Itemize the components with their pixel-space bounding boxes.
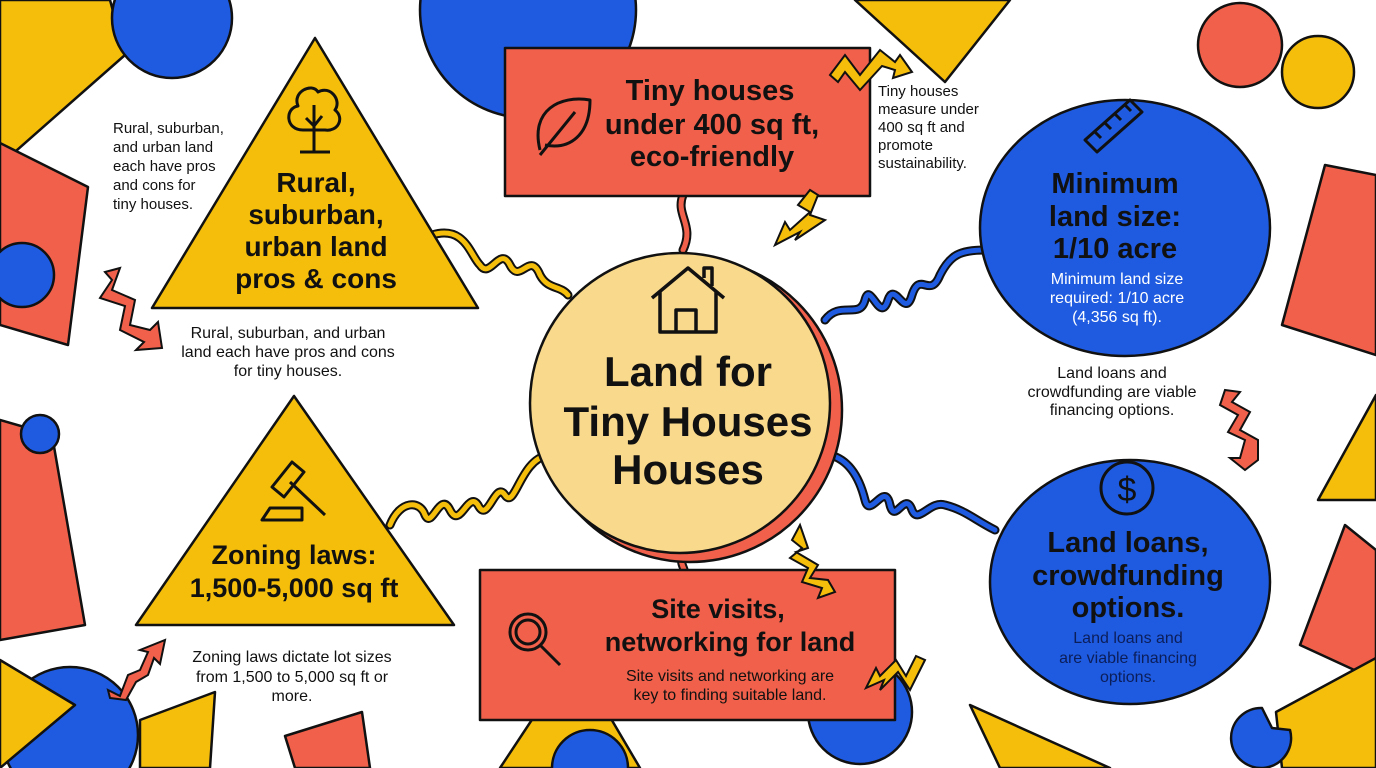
arrows: zigzags xyxy=(100,50,1258,700)
panel: top red rect: eco-friendly xyxy=(630,141,794,173)
text: zoning note: from 1,500 to 5,000 sq ft or xyxy=(196,669,389,686)
panel: zoning triangle xyxy=(136,396,454,625)
panel: minimum land size: required: 1/10 acre xyxy=(1050,290,1184,307)
icon: gavel xyxy=(262,462,325,520)
panel: top red rect xyxy=(505,48,870,196)
panel: site visits xyxy=(480,570,895,720)
icon: dollar xyxy=(1101,462,1153,514)
panel: minimum land size: Minimum land size xyxy=(1051,271,1183,288)
connectors xyxy=(390,195,995,575)
text: rural note left xyxy=(113,120,224,213)
icon: magnifier xyxy=(510,614,560,665)
text: rural note left: tiny houses. xyxy=(113,196,193,213)
text: rural note below: Rural, suburban, and urban xyxy=(191,325,385,342)
panel: land loans xyxy=(990,460,1270,704)
panel: top red rect: under 400 sq ft, xyxy=(605,109,819,141)
panel: site visits: networking for land xyxy=(605,627,855,657)
panel: center circle: Tiny Houses xyxy=(564,398,812,445)
panel: rural triangle xyxy=(152,38,478,308)
text: rural note left: each have pros xyxy=(113,158,216,175)
text: zoning note xyxy=(192,649,392,705)
icon: ruler xyxy=(1085,100,1142,152)
panel: minimum land size xyxy=(980,100,1270,356)
panel: zoning triangle: Zoning laws: xyxy=(212,540,376,570)
text: rural note below: land each have pros and cons xyxy=(181,344,395,361)
panel: rural triangle: Rural, xyxy=(276,167,356,198)
text: tiny houses note: Tiny houses xyxy=(878,83,958,100)
text: tiny houses note xyxy=(878,83,979,172)
panel: land loans: are viable financing xyxy=(1059,650,1197,667)
panel: minimum land size: land size: xyxy=(1049,201,1181,233)
panel: minimum land size: Minimum xyxy=(1051,168,1179,200)
panel: site visits: key to finding suitable land. xyxy=(633,687,827,704)
panel: rural triangle: suburban, xyxy=(248,199,384,230)
icon: dollar: $ xyxy=(1118,471,1137,509)
text: tiny houses note: promote xyxy=(878,137,933,154)
text: rural note left: and cons for xyxy=(113,177,196,194)
panel: site visits: Site visits, xyxy=(651,594,785,624)
panel: rural triangle: pros & cons xyxy=(235,263,397,294)
icon: house xyxy=(652,268,724,332)
text: financing note xyxy=(1028,365,1197,419)
text: tiny houses note: measure under xyxy=(878,101,979,118)
text: zoning note: more. xyxy=(272,688,312,705)
panel: zoning triangle: 1,500-5,000 sq ft xyxy=(190,573,398,603)
panel: land loans: options. xyxy=(1072,592,1184,624)
panel: land loans: crowdfunding xyxy=(1032,560,1224,592)
icon: tree xyxy=(289,88,340,152)
text: rural note left: Rural, suburban, xyxy=(113,120,224,137)
panel: center circle: Houses xyxy=(612,446,764,493)
panel: land loans: options. xyxy=(1100,669,1156,686)
panel: minimum land size: (4,356 sq ft). xyxy=(1072,309,1162,326)
panel: center circle xyxy=(530,253,842,562)
text: rural note below xyxy=(181,325,395,380)
text: financing note: crowdfunding are viable xyxy=(1028,384,1197,401)
text: rural note left: and urban land xyxy=(113,139,213,156)
panel: rural triangle: urban land xyxy=(244,231,388,262)
panel: land loans: Land loans, xyxy=(1047,527,1209,559)
panel: land loans: Land loans and xyxy=(1073,630,1183,647)
text: zoning note: Zoning laws dictate lot sizes xyxy=(192,649,392,666)
text: tiny houses note: sustainability. xyxy=(878,155,967,172)
text: tiny houses note: 400 sq ft and xyxy=(878,119,965,136)
text: financing note: financing options. xyxy=(1050,402,1174,419)
panel: site visits: Site visits and networking are xyxy=(626,668,834,685)
text: rural note below: for tiny houses. xyxy=(234,363,342,380)
title: Land for xyxy=(604,348,772,395)
text: financing note: Land loans and xyxy=(1057,365,1167,382)
panel: top red rect: Tiny houses xyxy=(626,75,794,107)
icon: leaf xyxy=(538,99,590,155)
panel: minimum land size: 1/10 acre xyxy=(1053,233,1177,265)
